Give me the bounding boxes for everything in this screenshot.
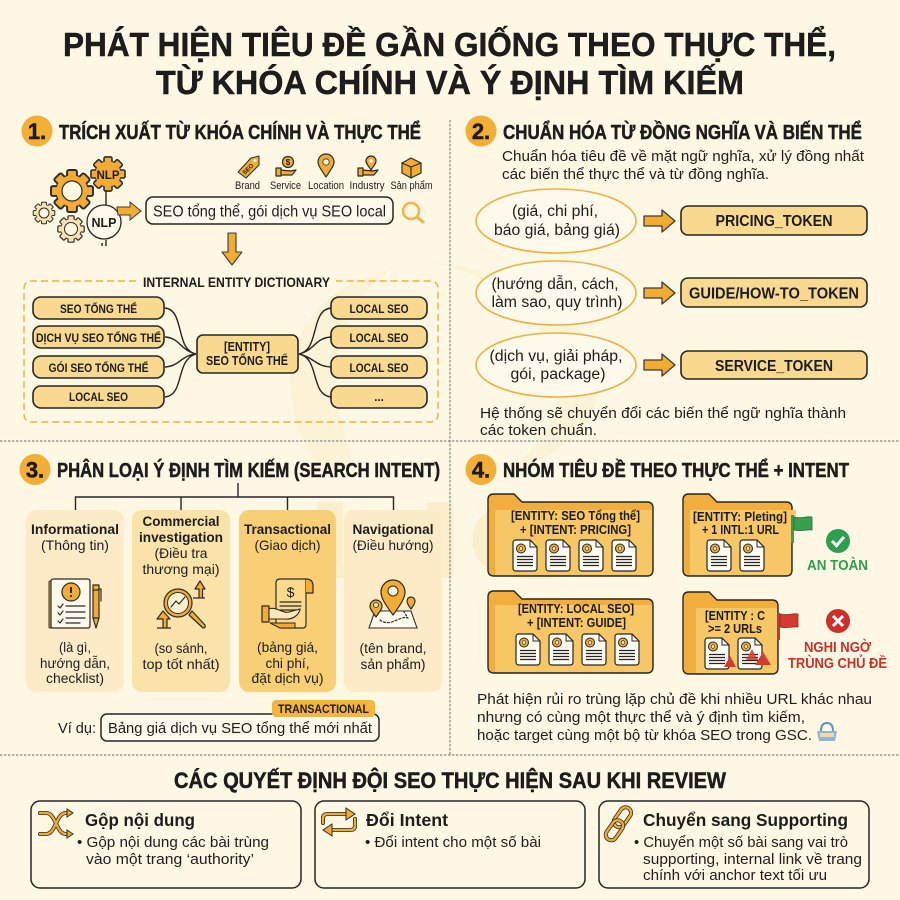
- duplicate status: TRÙNG CHỦ ĐỀ: [788, 654, 887, 672]
- service mapping: SERVICE_TOKEN: [715, 358, 833, 375]
- dictionary heading: INTERNAL ENTITY DICTIONARY: [143, 274, 331, 290]
- guide mapping: làm sao, quy trình): [492, 294, 622, 311]
- icon: NLP gears: NLP: [92, 216, 116, 230]
- folder: SEO tong the pricing: + [INTENT: PRICING]: [520, 523, 631, 537]
- step 4 number badge: [466, 454, 496, 485]
- step 1 number badge: [22, 116, 52, 146]
- arrow: NLP to query: [117, 202, 141, 220]
- right entity variants: LOCAL SEO: [350, 302, 408, 316]
- entity type labels: [235, 180, 432, 192]
- card: informational: Informational: [31, 521, 119, 537]
- card: informational: hướng dẫn,: [40, 655, 110, 671]
- watermark logo: [290, 260, 605, 602]
- step 2 description: [502, 148, 865, 183]
- entity type labels: Sản phẩm: [390, 180, 432, 192]
- left entity variants: SEO TỔNG THỂ: [60, 301, 137, 316]
- folder: suspected duplicate: [ENTITY : C: [705, 609, 765, 623]
- card: transactional: Transactional: [244, 521, 331, 537]
- step 4 description: Phát hiện rủi ro trùng lặp chủ đề khi nhiều URL khác nhau: [477, 691, 872, 708]
- icon: shuffle arrows: [40, 809, 73, 838]
- pricing mapping: [476, 189, 867, 253]
- guide mapping: GUIDE/HOW-TO_TOKEN: [689, 286, 859, 302]
- step 2 description: Chuẩn hóa tiêu đề về mặt ngữ nghĩa, xử lý đồng nhất: [502, 148, 865, 165]
- right entity variants: LOCAL SEO: [350, 361, 408, 375]
- icon: map pins: [369, 580, 417, 628]
- icon: brand tag: [238, 156, 259, 178]
- icon: chain link: [604, 805, 633, 842]
- icon: service coin and hand: [276, 156, 296, 176]
- card: switch to supporting: • Chuyển một số bài sang vai trò: [634, 834, 848, 851]
- card: navigational: (Điều hướng): [352, 537, 434, 553]
- card: navigational: [344, 510, 442, 692]
- dashed dividers: [0, 120, 900, 755]
- card: commercial investigation: top tốt nhất): [142, 656, 220, 672]
- icon: NLP gears: [33, 157, 125, 246]
- connector lines: [165, 308, 331, 397]
- transactional badge: TRANSACTIONAL: [278, 704, 369, 716]
- folder: SEO tong the pricing: [488, 494, 653, 576]
- transactional badge: [272, 700, 375, 717]
- right entity variants: LOCAL SEO: [350, 331, 408, 345]
- icon: invoice and hand: $: [287, 584, 295, 600]
- icon: swap arrows: [323, 808, 355, 836]
- card: change intent: • Đổi intent cho một số bài: [365, 834, 541, 851]
- card: commercial investigation: thương mại): [142, 561, 220, 577]
- step 2 footer text: các token chuẩn.: [480, 422, 597, 439]
- title: TỪ KHÓA CHÍNH VÀ Ý ĐỊNH TÌM KIẾM: [156, 64, 744, 101]
- pricing mapping: báo giá, bảng giá): [494, 222, 620, 239]
- panel: step 3 search intent: [20, 454, 442, 741]
- folder: safe: + 1 INTL:1 URL: [702, 523, 779, 537]
- pricing mapping: (giá, chi phí,: [512, 203, 598, 220]
- card: informational: checklist): [46, 670, 104, 686]
- card: navigational: (tên brand,: [360, 640, 426, 656]
- pricing mapping: PRICING_TOKEN: [716, 213, 832, 230]
- icon: invoice and hand: [262, 579, 313, 628]
- folder: local seo guide: + [INTENT: GUIDE]: [527, 616, 626, 630]
- card: commercial investigation: Commercial: [142, 513, 220, 529]
- right entity variants: ...: [374, 392, 384, 404]
- query box: SEO tổng thể, gói dịch vụ SEO local: [153, 202, 386, 220]
- step 3 number badge: 3.: [26, 458, 44, 482]
- icon: magnifier with trend: [157, 581, 205, 628]
- folder: safe: [ENTITY: Pleting]: [693, 510, 787, 524]
- step 2 number badge: 2.: [472, 119, 490, 144]
- card: merge content: vào một trang ‘authority’: [86, 851, 254, 868]
- folder: suspected duplicate: >= 2 URLs: [708, 622, 762, 636]
- card: navigational: sản phẩm): [360, 656, 426, 672]
- icon: industry pin and hand: [358, 156, 378, 176]
- card: switch to supporting: supporting, internal link về trang: [643, 851, 862, 868]
- guide mapping: (hướng dẫn, cách,: [492, 276, 618, 293]
- icon: checklist and pen: [49, 579, 101, 628]
- card: transactional: (bảng giá,: [257, 639, 318, 655]
- green flag: [791, 515, 812, 543]
- step 2 footer text: Hệ thống sẽ chuyển đổi các biến thể ngữ nghĩa thành: [480, 405, 846, 422]
- card: informational: (là gì,: [59, 639, 91, 655]
- icon: location pin: [318, 154, 334, 177]
- entity type labels: Brand: [235, 180, 260, 192]
- intent tree connector: [76, 483, 394, 511]
- duplicate status: NGHI NGỜ: [804, 638, 872, 656]
- service mapping: [476, 333, 867, 397]
- card: transactional: chi phí,: [266, 655, 310, 671]
- card: change intent: Đổi Intent: [366, 810, 448, 830]
- folder: local seo guide: [ENTITY: LOCAL SEO]: [518, 602, 634, 616]
- step 4 description: nhưng có cùng một thực thể và ý định tìm kiếm,: [477, 709, 805, 726]
- query box: [146, 197, 393, 224]
- left entity variants: [33, 297, 164, 408]
- card: switch to supporting: chính với anchor text tối ưu: [643, 867, 827, 884]
- icon: shopping basket: [817, 723, 837, 741]
- safe status: [807, 529, 868, 574]
- example query: [58, 700, 379, 741]
- entity type labels: Service: [270, 180, 301, 192]
- entity type labels: Location: [308, 180, 344, 192]
- card: informational: (Thông tin): [41, 537, 109, 553]
- arrow: down to dictionary: [222, 233, 242, 265]
- folder: local seo guide: [488, 591, 653, 673]
- entity type labels: Industry: [350, 180, 385, 192]
- title: [63, 25, 836, 101]
- folder: safe: [683, 494, 796, 576]
- duplicate status: [788, 609, 887, 672]
- card: informational: [26, 510, 124, 692]
- step 2 description: các biến thể thực thể và từ đồng nghĩa.: [502, 166, 769, 183]
- step 1 number badge: 1.: [28, 119, 46, 144]
- service mapping: (dịch vụ, giải pháp,: [490, 348, 622, 365]
- panel: step 4 group titles: [466, 454, 887, 744]
- card: navigational: Navigational: [352, 521, 434, 537]
- red flag: [777, 613, 798, 640]
- card: transactional: (Giao dịch): [254, 537, 320, 553]
- card: merge content: • Gộp nội dung các bài trùng: [77, 834, 269, 851]
- card: switch to supporting: Chuyển sang Supporting: [643, 810, 848, 830]
- title: PHÁT HIỆN TIÊU ĐỀ GẦN GIỐNG THEO THỰC THỂ,: [63, 25, 836, 63]
- left entity variants: LOCAL SEO: [69, 390, 128, 404]
- card: commercial investigation: (so sánh,: [154, 640, 208, 656]
- panel: step 1 extract keywords and entities: [22, 116, 438, 422]
- step 2 footer text: [480, 405, 846, 439]
- card: change intent: [315, 801, 585, 888]
- card: transactional: đặt dịch vụ): [252, 670, 324, 686]
- card: merge content: Gộp nội dung: [85, 810, 195, 830]
- watermark logo: LIG: [305, 479, 605, 602]
- step 3 number badge: [20, 454, 50, 485]
- icon: NLP gears: NLP: [96, 170, 120, 182]
- card: commercial investigation: investigation: [139, 529, 223, 545]
- guide mapping: [476, 261, 867, 325]
- icon: service coin and hand: $: [286, 158, 291, 167]
- card: switch to supporting: [599, 801, 869, 888]
- folder: SEO tong the pricing: [ENTITY: SEO Tổng thể]: [511, 509, 640, 523]
- central entity node: [197, 335, 298, 373]
- step 1 heading: TRÍCH XUẤT TỪ KHÓA CHÍNH VÀ THỰC THỂ: [59, 120, 421, 144]
- safe status: AN TOÀN: [807, 557, 868, 574]
- step 3 heading: PHÂN LOẠI Ý ĐỊNH TÌM KIẾM (SEARCH INTENT): [57, 458, 440, 482]
- central entity node: SEO TỔNG THỂ: [206, 353, 288, 368]
- step 4 number badge: 4.: [472, 458, 490, 482]
- service mapping: gói, package): [510, 366, 606, 383]
- icon: magnifier: [403, 203, 423, 222]
- step 2 number badge: [466, 116, 496, 146]
- panel: decisions after review: [31, 768, 869, 888]
- panel: internal entity dictionary: [24, 274, 438, 422]
- card: commercial investigation: (Điều tra: [154, 545, 208, 561]
- example query: Ví dụ:: [58, 721, 96, 737]
- step 4 description: hoặc target cùng một bộ từ khóa SEO trong GSC.: [477, 727, 812, 744]
- right entity variants: [331, 297, 427, 408]
- card: transactional: [239, 510, 336, 692]
- warning triangles: [724, 649, 771, 667]
- panel: step 2 normalize synonyms: [466, 116, 867, 439]
- left entity variants: GÓI SEO TỔNG THỂ: [48, 360, 148, 375]
- central entity node: [ENTITY]: [224, 340, 270, 354]
- folder: suspected duplicate: [683, 592, 778, 674]
- step 4 description: [477, 691, 872, 744]
- card: commercial investigation: [132, 510, 230, 692]
- example query: Bảng giá dịch vụ SEO tổng thể mới nhất: [108, 720, 373, 737]
- decisions heading: CÁC QUYẾT ĐỊNH ĐỘI SEO THỰC HIỆN SAU KHI REVIEW: [174, 768, 726, 793]
- icon: product box: [402, 158, 421, 178]
- icon row: entity types: [235, 154, 432, 192]
- left entity variants: DỊCH VỤ SEO TỔNG THỂ: [36, 330, 161, 345]
- card: merge content: [31, 801, 301, 888]
- icon: brand tag: SEO: [242, 163, 256, 176]
